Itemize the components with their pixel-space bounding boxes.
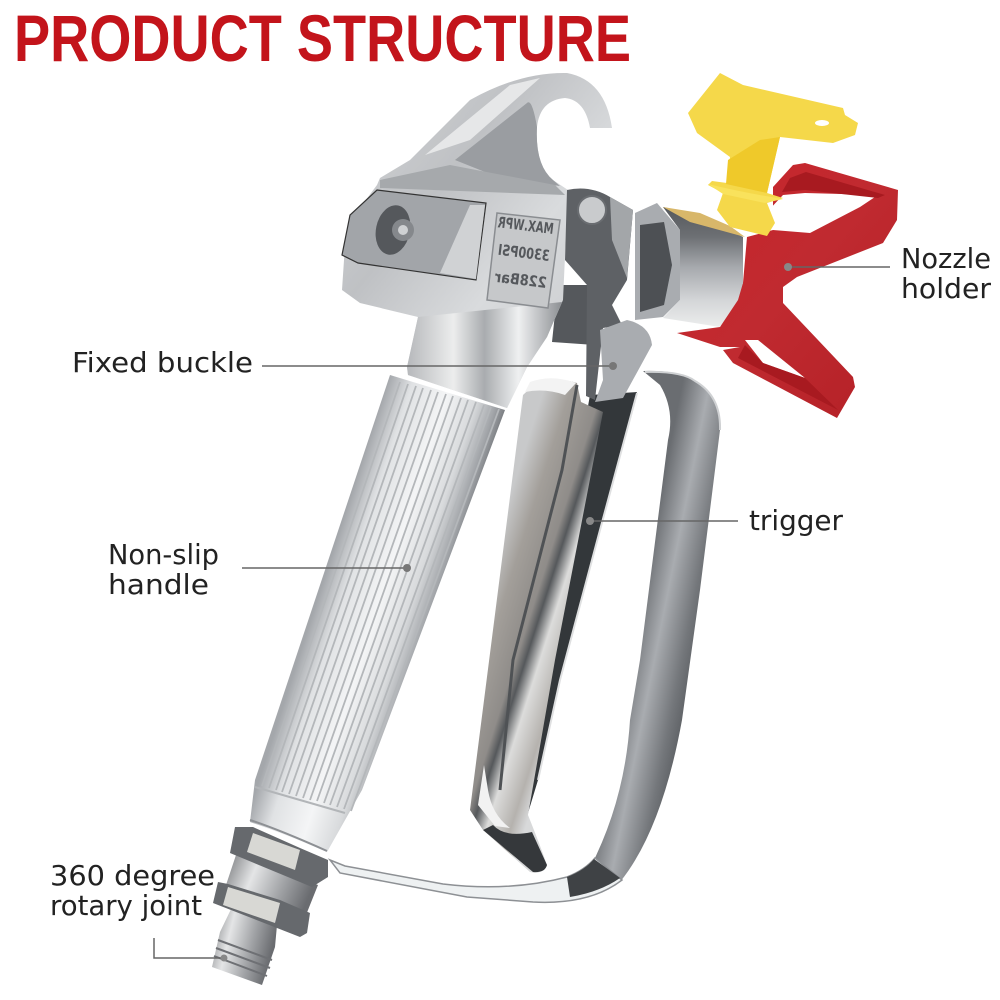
label: 360 degree rotary joint [50, 859, 228, 962]
handle [250, 375, 505, 852]
label: fixed buckle: Fixed buckle [72, 346, 253, 379]
label: trigger [586, 504, 843, 537]
yellow tip [688, 73, 858, 236]
trigger guard loop [330, 371, 720, 902]
label: nozzle holder: Nozzle [901, 242, 991, 275]
label: non-slip handle: Non-slip [108, 538, 219, 571]
label: trigger: trigger [749, 504, 843, 537]
barrel [663, 207, 743, 327]
label: fixed buckle [72, 346, 617, 379]
rotary joint [212, 827, 328, 985]
mechanism under head [552, 285, 595, 345]
label: 360 degree rotary joint: 360 degree [50, 859, 215, 892]
head and hook: MAX.WPR [497, 213, 555, 238]
label: nozzle holder [784, 242, 991, 305]
spray gun illustration [212, 73, 898, 985]
trigger blade [470, 378, 637, 873]
hex nut [635, 203, 680, 320]
head and hook: 228Bar [493, 268, 548, 292]
label: non-slip handle: handle [108, 568, 209, 601]
title: PRODUCT STRUCTURE [14, 1, 631, 75]
label: non-slip handle [108, 538, 411, 601]
head and hook: 3300PSI [497, 241, 551, 265]
bracket and fixed buckle lever [565, 189, 652, 402]
nozzle holder [677, 163, 898, 418]
label: 360 degree rotary joint: rotary joint [50, 889, 202, 922]
head and hook [342, 73, 612, 408]
label: nozzle holder: holder [901, 272, 991, 305]
